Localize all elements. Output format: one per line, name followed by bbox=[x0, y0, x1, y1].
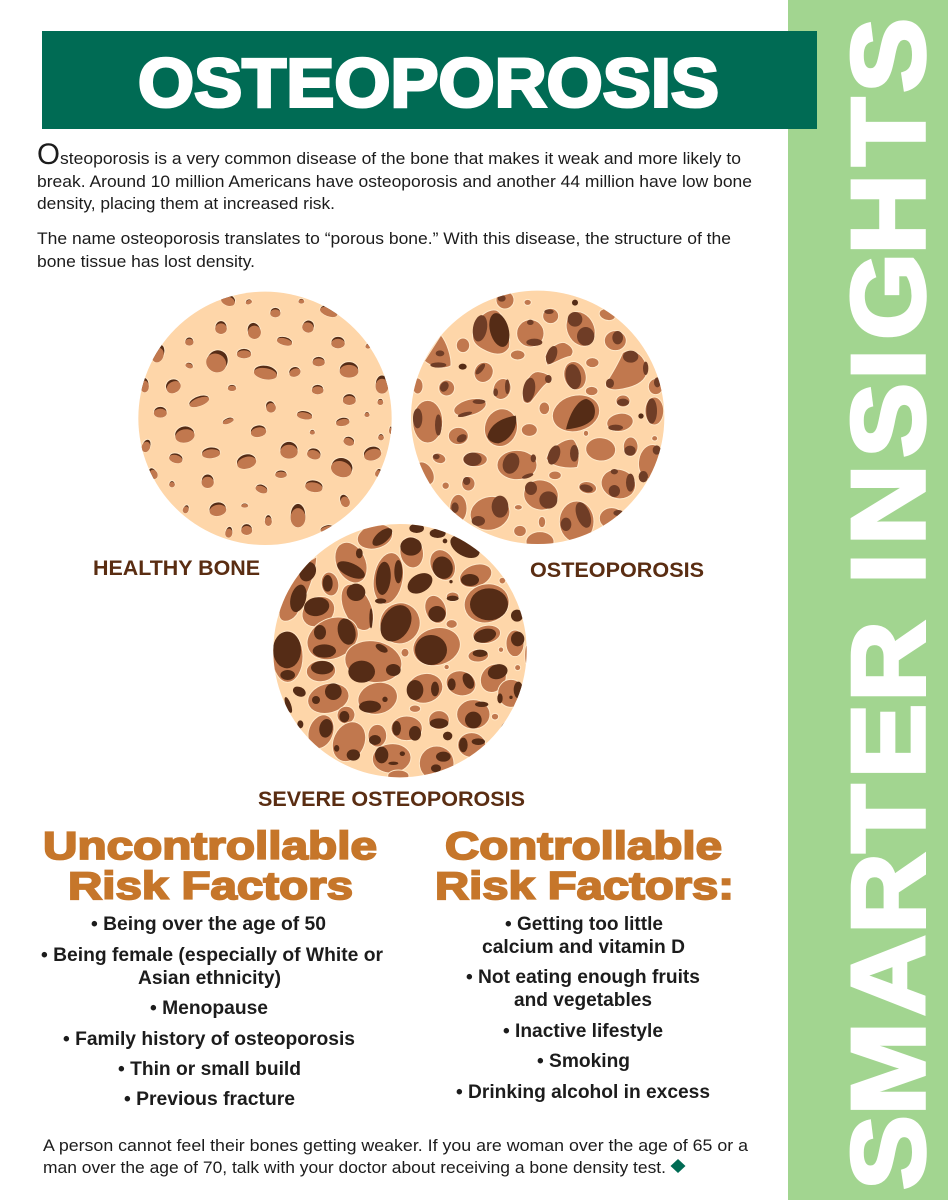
icon: end-mark diamond bbox=[670, 1159, 686, 1173]
intro text: density, placing them at increased risk. bbox=[37, 194, 335, 213]
list: controllable factors: • Inactive lifestyle bbox=[503, 1021, 663, 1042]
illustration: osteoporosis bone bbox=[411, 291, 666, 552]
sidebar panel bbox=[788, 0, 948, 1200]
illustration: healthy bone bbox=[138, 292, 392, 545]
heading: controllable risk factors bbox=[435, 825, 734, 908]
list: uncontrollable factors: • Thin or small build bbox=[118, 1059, 301, 1080]
list: uncontrollable factors: • Previous fracture bbox=[124, 1089, 295, 1110]
list: uncontrollable factors: • Being over the age of 50 bbox=[91, 914, 326, 935]
intro text: The name osteoporosis translates to “porous bone.” With this disease, the structure of the bbox=[37, 229, 731, 248]
list: uncontrollable factors: • Family history of osteoporosis bbox=[63, 1029, 355, 1050]
list: uncontrollable factors: Asian ethnicity) bbox=[138, 968, 281, 989]
heading: controllable risk factors: Controllable bbox=[445, 825, 722, 868]
heading: uncontrollable risk factors: Risk Factors bbox=[68, 865, 353, 908]
closing note: A person cannot feel their bones getting weaker. If you are woman over the age of 65 or a bbox=[43, 1136, 749, 1155]
list: controllable factors: • Getting too little bbox=[505, 914, 663, 935]
intro text: steoporosis is a very common disease of the bone that makes it weak and more likely to bbox=[60, 149, 741, 168]
list: controllable factors: and vegetables bbox=[514, 990, 652, 1011]
list: uncontrollable factors: • Menopause bbox=[150, 998, 268, 1019]
list: uncontrollable factors: • Being female (especially of White or bbox=[41, 945, 384, 966]
list: controllable factors bbox=[456, 914, 710, 1103]
heading: uncontrollable risk factors: Uncontrollable bbox=[43, 825, 377, 868]
closing note: man over the age of 70, talk with your doctor about receiving a bone density test. bbox=[43, 1158, 666, 1177]
heading: uncontrollable risk factors bbox=[43, 825, 377, 908]
list: controllable factors: calcium and vitamin D bbox=[482, 937, 685, 958]
intro text: break. Around 10 million Americans have osteoporosis and another 44 million have low bone bbox=[37, 172, 752, 191]
label: severe osteoporosis: SEVERE OSTEOPOROSIS bbox=[258, 788, 525, 811]
title banner: OSTEOPOROSIS bbox=[138, 44, 719, 122]
heading: controllable risk factors: Risk Factors: bbox=[435, 865, 734, 908]
closing note bbox=[43, 1136, 749, 1177]
label: osteoporosis: OSTEOPOROSIS bbox=[530, 559, 704, 582]
sidebar title: SMARTER INSIGHTS: SMARTER INSIGHTS bbox=[830, 18, 946, 1190]
illustration: severe osteoporosis bone bbox=[272, 520, 529, 781]
list: controllable factors: • Drinking alcohol in excess bbox=[456, 1082, 710, 1103]
list: controllable factors: • Smoking bbox=[537, 1051, 630, 1072]
intro text bbox=[37, 138, 752, 271]
intro text: O bbox=[37, 138, 60, 171]
list: uncontrollable factors bbox=[41, 914, 384, 1110]
title banner bbox=[42, 31, 817, 129]
list: controllable factors: • Not eating enough fruits bbox=[466, 967, 700, 988]
label: healthy bone: HEALTHY BONE bbox=[93, 557, 260, 580]
intro text: bone tissue has lost density. bbox=[37, 252, 255, 271]
